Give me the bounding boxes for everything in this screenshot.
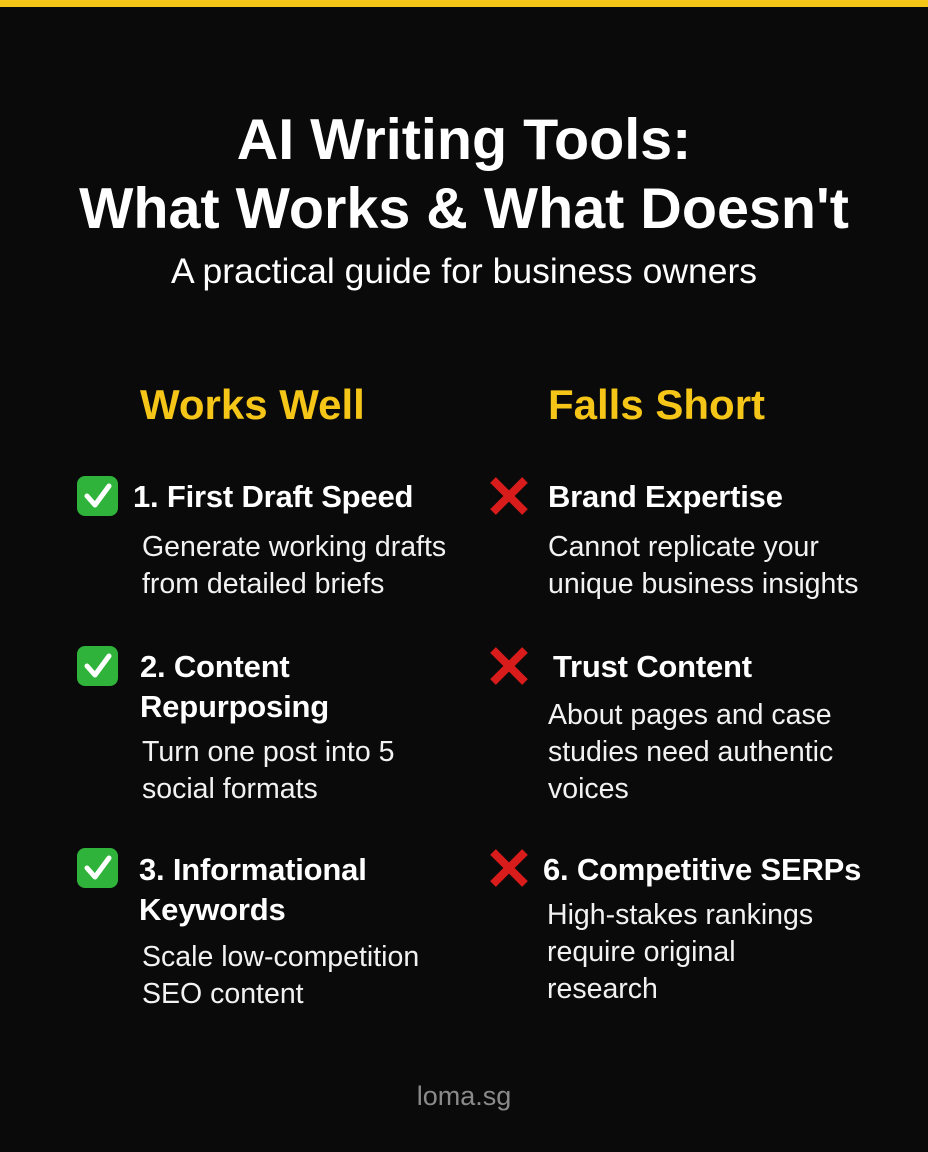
item 2: Repurposing — [140, 689, 329, 724]
item 5: Trust Content — [553, 649, 752, 684]
footer: loma.sg — [417, 1081, 511, 1111]
item 1: from detailed briefs — [142, 568, 384, 600]
title: AI Writing Tools: — [237, 108, 691, 172]
heading: falls short: Falls Short — [548, 381, 765, 428]
item 4 — [490, 477, 859, 600]
item 6: research — [547, 973, 658, 1005]
icon: check — [77, 848, 118, 888]
item 2: social formats — [142, 773, 318, 805]
item 3: 3. Informational — [139, 852, 367, 887]
item 1 — [77, 476, 446, 600]
item 3: Keywords — [139, 892, 286, 927]
item 2: 2. Content — [140, 649, 290, 684]
item 6: High-stakes rankings — [547, 899, 813, 931]
item 3 — [77, 848, 419, 1010]
icon: cross — [490, 647, 528, 685]
icon: check — [77, 476, 118, 516]
subtitle: A practical guide for business owners — [171, 251, 757, 291]
title — [79, 108, 849, 241]
item 4: Brand Expertise — [548, 479, 783, 514]
item 4: Cannot replicate your — [548, 531, 819, 563]
title: What Works & What Doesn't — [79, 177, 849, 241]
icon: check — [77, 646, 118, 686]
item 5: About pages and case — [548, 699, 832, 731]
item 1: Generate working drafts — [142, 531, 446, 563]
heading: works well: Works Well — [140, 381, 365, 428]
item 2: Turn one post into 5 — [142, 736, 394, 768]
icon: cross — [490, 477, 528, 515]
item 3: SEO content — [142, 978, 304, 1010]
top accent bar — [0, 0, 928, 7]
item 5: studies need authentic — [548, 736, 833, 768]
item 6: 6. Competitive SERPs — [543, 852, 861, 887]
item 5 — [490, 647, 833, 805]
item 6: require original — [547, 936, 736, 968]
icon: cross — [490, 849, 528, 887]
item 4: unique business insights — [548, 568, 859, 600]
item 2 — [77, 646, 394, 805]
item 6 — [490, 849, 861, 1005]
item 3: Scale low-competition — [142, 941, 419, 973]
item 1: 1. First Draft Speed — [133, 479, 413, 514]
item 5: voices — [548, 773, 629, 805]
